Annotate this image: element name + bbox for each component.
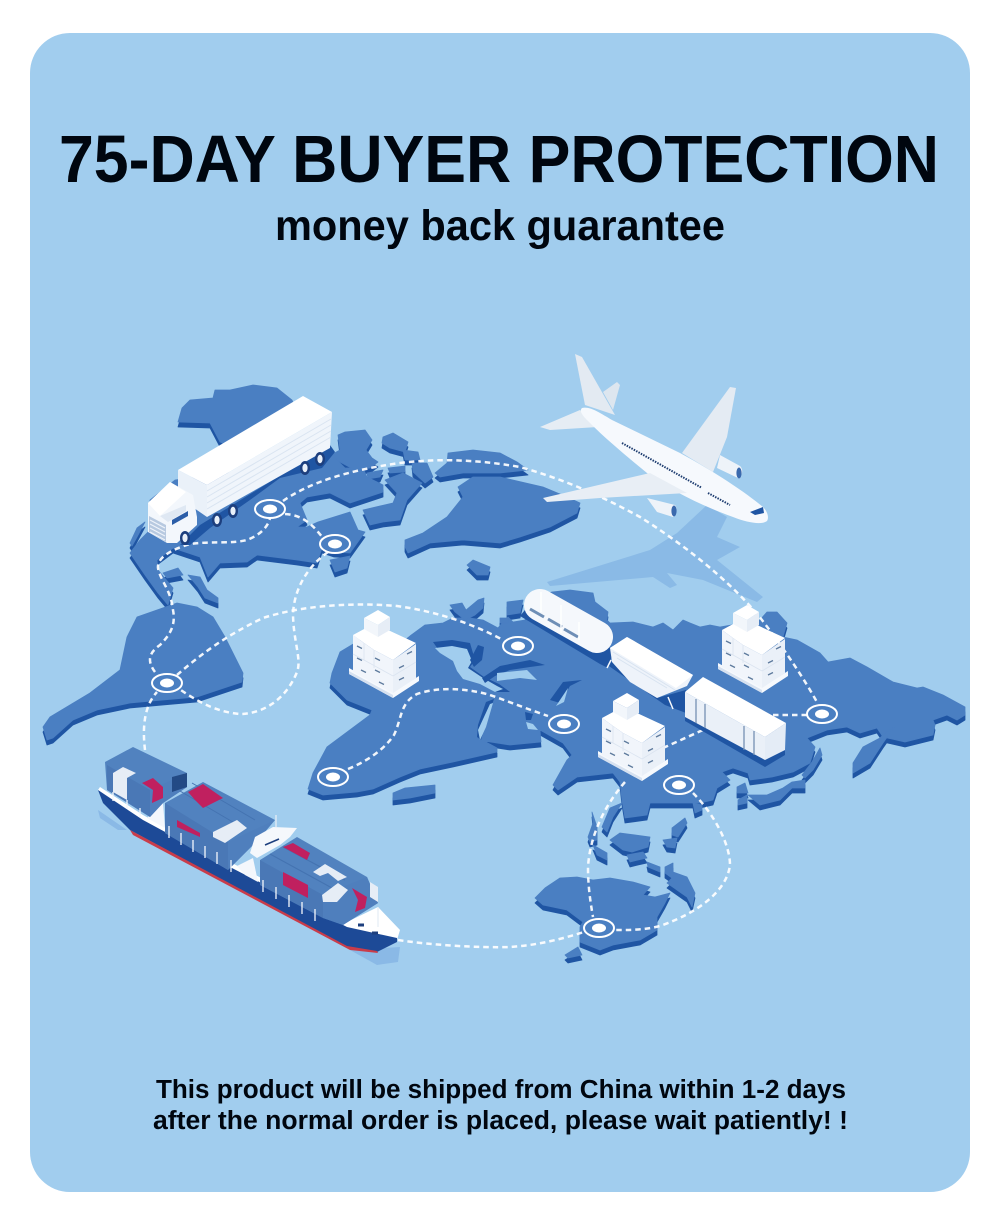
world map illustration <box>43 354 965 965</box>
icon: container ship <box>98 747 400 965</box>
icon: cargo pallet west <box>349 610 419 698</box>
eurasia and africa <box>308 590 965 818</box>
location markers <box>152 500 837 937</box>
australia <box>535 877 670 950</box>
arctic strip <box>435 450 528 477</box>
west sliver <box>130 522 145 546</box>
arctic island group <box>367 433 433 483</box>
tasmania <box>565 947 582 958</box>
container wagon <box>685 677 786 767</box>
small island <box>467 560 490 575</box>
north-west landmass <box>178 385 300 450</box>
greenland <box>405 477 580 553</box>
caribbean islands <box>163 568 218 603</box>
footer line one: This product will be shipped from China within 1-2 days <box>156 1076 846 1104</box>
icon: truck <box>148 396 335 545</box>
dashed routes <box>144 460 818 947</box>
subtitle: money back guarantee <box>275 202 725 250</box>
icon: airplane shadow <box>547 505 763 602</box>
kamchatka island <box>853 726 895 773</box>
title: 75-DAY BUYER PROTECTION <box>59 122 939 197</box>
scandinavia <box>450 598 523 623</box>
icon: cargo pallet east <box>718 605 788 693</box>
inland seas <box>433 640 582 740</box>
icon: cargo pallet middle <box>598 693 668 781</box>
south east asia islands <box>588 803 702 872</box>
new guinea <box>665 863 695 907</box>
hopper wagon <box>606 637 693 713</box>
arctic islands <box>331 430 378 470</box>
footer line two: after the normal order is placed, please wait patiently! ! <box>153 1107 848 1135</box>
tank wagon <box>520 592 614 668</box>
south america <box>43 603 243 740</box>
footer text <box>153 1076 848 1135</box>
arctic island: baffin <box>363 473 422 525</box>
madagascar <box>393 785 435 800</box>
japan islands <box>737 748 822 805</box>
island: nova scotia <box>330 556 350 572</box>
icon: airplane <box>540 354 768 523</box>
icon: train <box>520 592 786 767</box>
north america <box>130 453 383 605</box>
landmasses <box>43 385 965 958</box>
